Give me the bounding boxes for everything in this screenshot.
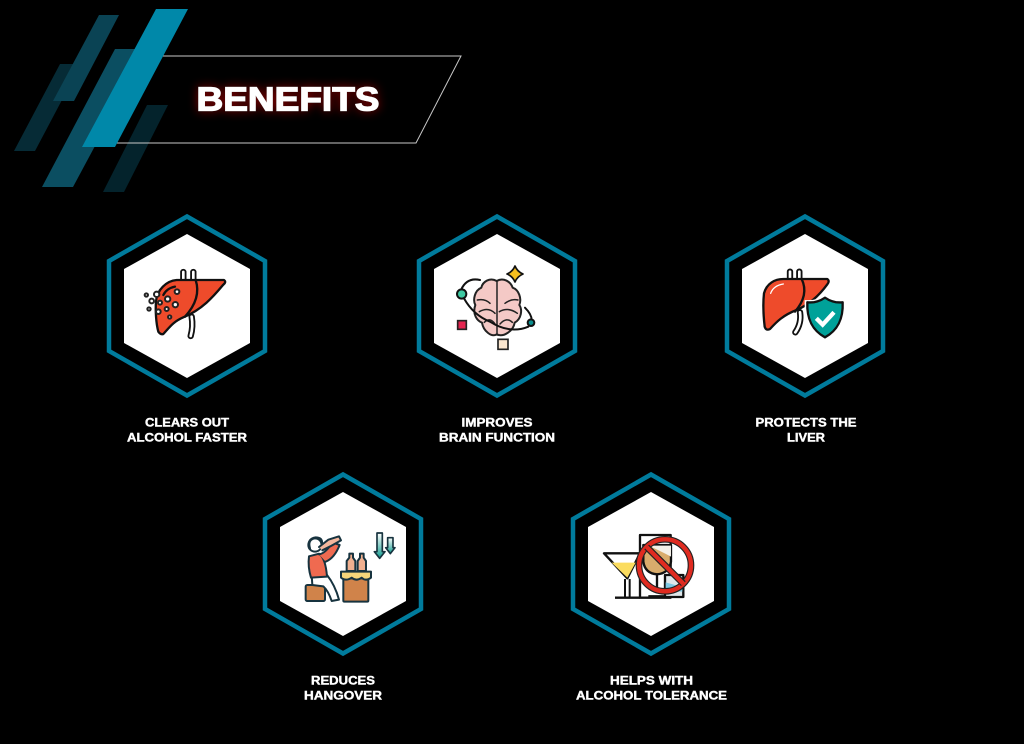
label: ALCOHOL FASTER: [127, 430, 247, 444]
panel: helps with alcohol tolerance: [573, 474, 729, 702]
hexagon badge: [573, 474, 729, 654]
label: [576, 674, 727, 702]
icon: drinks with prohibition sign: [604, 535, 691, 598]
label: [127, 416, 247, 444]
label: ALCOHOL TOLERANCE: [576, 688, 727, 702]
icon: brain: [457, 266, 534, 349]
hexagon badge: [109, 216, 265, 396]
hexagon badge: [727, 216, 883, 396]
label: PROTECTS THE: [756, 416, 856, 430]
label: BRAIN FUNCTION: [439, 430, 555, 444]
label: [756, 416, 856, 444]
panel: improves brain function: [419, 216, 575, 444]
label: HANGOVER: [304, 688, 382, 702]
label: [304, 674, 382, 702]
label: IMPROVES: [462, 416, 532, 430]
title: BENEFITS: [196, 82, 380, 118]
label: CLEARS OUT: [145, 416, 230, 430]
hexagon badge: [265, 474, 421, 654]
decorative slanted bars: [14, 9, 461, 192]
label: HELPS WITH: [610, 674, 693, 688]
panel: clears out alcohol faster: [109, 216, 265, 444]
panel: reduces hangover: [265, 474, 421, 702]
hexagon badge: [419, 216, 575, 396]
icon: liver with dots: [145, 272, 225, 336]
label: REDUCES: [311, 674, 375, 688]
label: LIVER: [787, 430, 825, 444]
panel: protects the liver: [727, 216, 883, 444]
icon: person drinking beside bottles: [306, 533, 395, 602]
label: [439, 416, 555, 444]
icon: liver with shield: [763, 272, 845, 340]
